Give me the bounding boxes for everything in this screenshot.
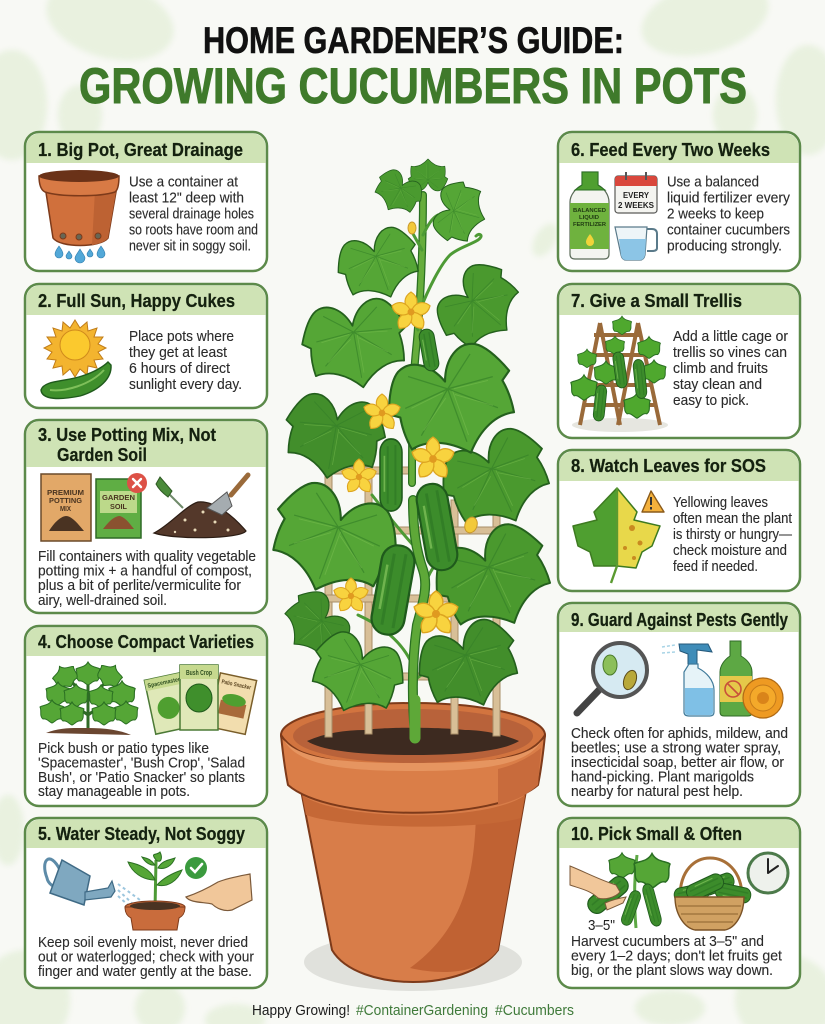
text block: Check often for aphids, mildew, and	[571, 726, 788, 742]
text block	[38, 741, 245, 800]
title	[79, 20, 747, 114]
panel: 4 compact varieties	[25, 626, 267, 806]
text block: climb and fruits	[673, 361, 768, 377]
text block: 6 hours of direct	[129, 361, 230, 377]
text block: finger and water gently at the base.	[38, 964, 252, 980]
heading: 5. Water Steady, Not Soggy	[38, 823, 246, 844]
text block	[673, 495, 792, 575]
text block: so roots have room and	[129, 222, 258, 238]
icon: small trellis with vines	[571, 316, 668, 432]
icon: spray bottle	[662, 644, 714, 716]
text block: sunlight every day.	[129, 377, 242, 393]
flowers	[332, 222, 479, 637]
panel: 8 watch leaves	[558, 450, 800, 591]
terracotta pot	[281, 703, 545, 982]
icon: sun and cucumber	[41, 320, 111, 398]
ground shadow	[304, 933, 522, 991]
icon: fertilizer bottle: LIQUID	[579, 215, 599, 221]
icon: marigold	[743, 678, 783, 718]
footer	[252, 1003, 574, 1019]
heading: 10. Pick Small & Often	[571, 823, 742, 844]
text block: every 1–2 days; don't let fruits get	[571, 948, 782, 964]
soil	[307, 728, 519, 755]
cucumbers	[369, 328, 460, 637]
icon: watering can	[45, 859, 140, 905]
panel: 2 full sun	[25, 284, 267, 408]
icon: potting mix bag	[41, 474, 91, 541]
icon: seed packets	[144, 665, 257, 734]
text block: Keep soil evenly moist, never dried	[38, 935, 248, 951]
icon: garden soil bag with red x: GARDEN	[102, 495, 135, 502]
icon: green check	[185, 857, 207, 879]
text block: airy, well-drained soil.	[38, 593, 167, 609]
text block: check moisture and	[673, 543, 787, 559]
text block: Pick bush or patio types like	[38, 741, 209, 757]
icon: garden soil bag with red x: SOIL	[110, 504, 128, 511]
label: size: 3–5"	[588, 918, 615, 934]
icon: potting mix bag: POTTING	[49, 498, 83, 505]
panel: 10 pick	[558, 818, 800, 988]
heading: 8. Watch Leaves for SOS	[571, 455, 766, 476]
icon: calendar: 2 WEEKS	[618, 200, 654, 210]
text block: trellis so vines can	[673, 345, 787, 361]
title: HOME GARDENER’S GUIDE:	[203, 20, 624, 61]
text block: often mean the plant	[673, 511, 792, 527]
text block: 2 weeks to keep	[667, 206, 764, 222]
icon: seed packets: Spacemaster	[147, 677, 181, 690]
text block: stay manageable in pots.	[38, 784, 190, 800]
icon: potting mix bag: MIX	[60, 506, 71, 513]
icon: fertilizer bottle	[570, 172, 609, 259]
icon: measuring cup	[615, 227, 657, 260]
text block: feed if needed.	[673, 559, 758, 575]
text block: big, or the plant slows way down.	[571, 963, 773, 979]
leaves	[257, 159, 567, 726]
text block	[38, 549, 256, 609]
icon: fertilizer bottle: FERTILIZER	[573, 222, 606, 228]
icon: clock	[748, 853, 788, 893]
text block: beetles; use a strong water spray,	[571, 740, 781, 756]
text block: out or waterlogged; check with your	[38, 950, 254, 966]
panel: 7 trellis	[558, 284, 800, 438]
heading: 7. Give a Small Trellis	[571, 290, 742, 311]
footer: #Cucumbers	[495, 1003, 574, 1019]
text block: they get at least	[129, 345, 227, 361]
text block: is thirsty or hungry—	[673, 527, 792, 543]
footer: Happy Growing!	[252, 1003, 350, 1019]
icon: yellowing leaf	[573, 488, 664, 583]
text block: Add a little cage or	[673, 329, 788, 345]
icon: seed packets: Bush Crop	[186, 670, 212, 677]
icon: bush	[40, 659, 138, 735]
text block: potting mix + a handful of compost,	[38, 564, 252, 580]
icon: garden soil bag with red x	[96, 473, 147, 538]
text block	[571, 726, 788, 800]
text block: nearby for natural pest help.	[571, 784, 743, 800]
text block: plus a bit of perlite/vermiculite for	[38, 578, 241, 594]
lower stem over leaves	[413, 500, 425, 738]
footer: #ContainerGardening	[356, 1003, 488, 1019]
text block	[129, 174, 258, 254]
text block	[667, 174, 791, 254]
text block: 'Spacemaster', 'Bush Crop', 'Salad	[38, 756, 245, 772]
icon: potting mix bag: PREMIUM	[47, 490, 84, 497]
icon: insecticide bottle	[720, 641, 752, 716]
text block	[129, 329, 242, 393]
text block: least 12" deep with	[129, 190, 244, 206]
text block: never sit in soggy soil.	[129, 238, 251, 254]
panel: 1 big pot	[25, 132, 267, 271]
heading: Garden Soil	[57, 444, 147, 465]
text block: Use a balanced	[667, 174, 759, 190]
heading: 3. Use Potting Mix, Not	[38, 424, 216, 445]
text block: Harvest cucumbers at 3–5" and	[571, 934, 764, 950]
icon: pointing hand	[186, 874, 252, 911]
icon: calendar: EVERY	[623, 190, 649, 200]
heading	[38, 424, 216, 465]
icon: pot with drainage drops	[39, 170, 119, 263]
icon: hand picking cucumber on vine	[570, 853, 670, 928]
icon: calendar	[615, 172, 657, 213]
panel: 9 pests	[558, 603, 800, 806]
icon: basket	[673, 858, 752, 930]
text block	[38, 935, 254, 980]
text block: Use a container at	[129, 174, 238, 190]
text block: easy to pick.	[673, 393, 749, 409]
icon: fertilizer bottle: BALANCED	[573, 208, 606, 214]
heading: 2. Full Sun, Happy Cukes	[38, 290, 235, 311]
text block	[673, 329, 788, 409]
text block: producing strongly.	[667, 238, 782, 254]
icon: seedling in pot	[125, 852, 185, 930]
text block	[571, 934, 782, 979]
text block: Place pots where	[129, 329, 234, 345]
heading: 4. Choose Compact Varieties	[38, 631, 254, 652]
vine stems	[358, 195, 481, 682]
heading: 1. Big Pot, Great Drainage	[38, 139, 243, 160]
panel: 5 water steady	[25, 818, 267, 988]
heading: 6. Feed Every Two Weeks	[571, 139, 770, 160]
panel: 6 feed	[558, 132, 800, 271]
icon: seed packets: Patio Snacker	[221, 679, 252, 692]
text block: insecticidal soap, better air flow, or	[571, 755, 784, 771]
text block: hand-picking. Plant marigolds	[571, 770, 754, 786]
text block: several drainage holes	[129, 206, 254, 222]
trellis	[325, 465, 500, 737]
text block: container cucumbers	[667, 222, 790, 238]
panel: 3 potting mix	[25, 420, 267, 613]
icon: soil pile and trowel	[154, 475, 248, 538]
text block: Bush', or 'Patio Snacker' so plants	[38, 770, 245, 786]
icon: magnifier with bugs	[577, 643, 647, 713]
text block: liquid fertilizer every	[667, 190, 791, 206]
text block: stay clean and	[673, 377, 762, 393]
text block: Yellowing leaves	[673, 495, 768, 511]
central plant in pot	[257, 159, 567, 991]
text block: Fill containers with quality vegetable	[38, 549, 256, 565]
